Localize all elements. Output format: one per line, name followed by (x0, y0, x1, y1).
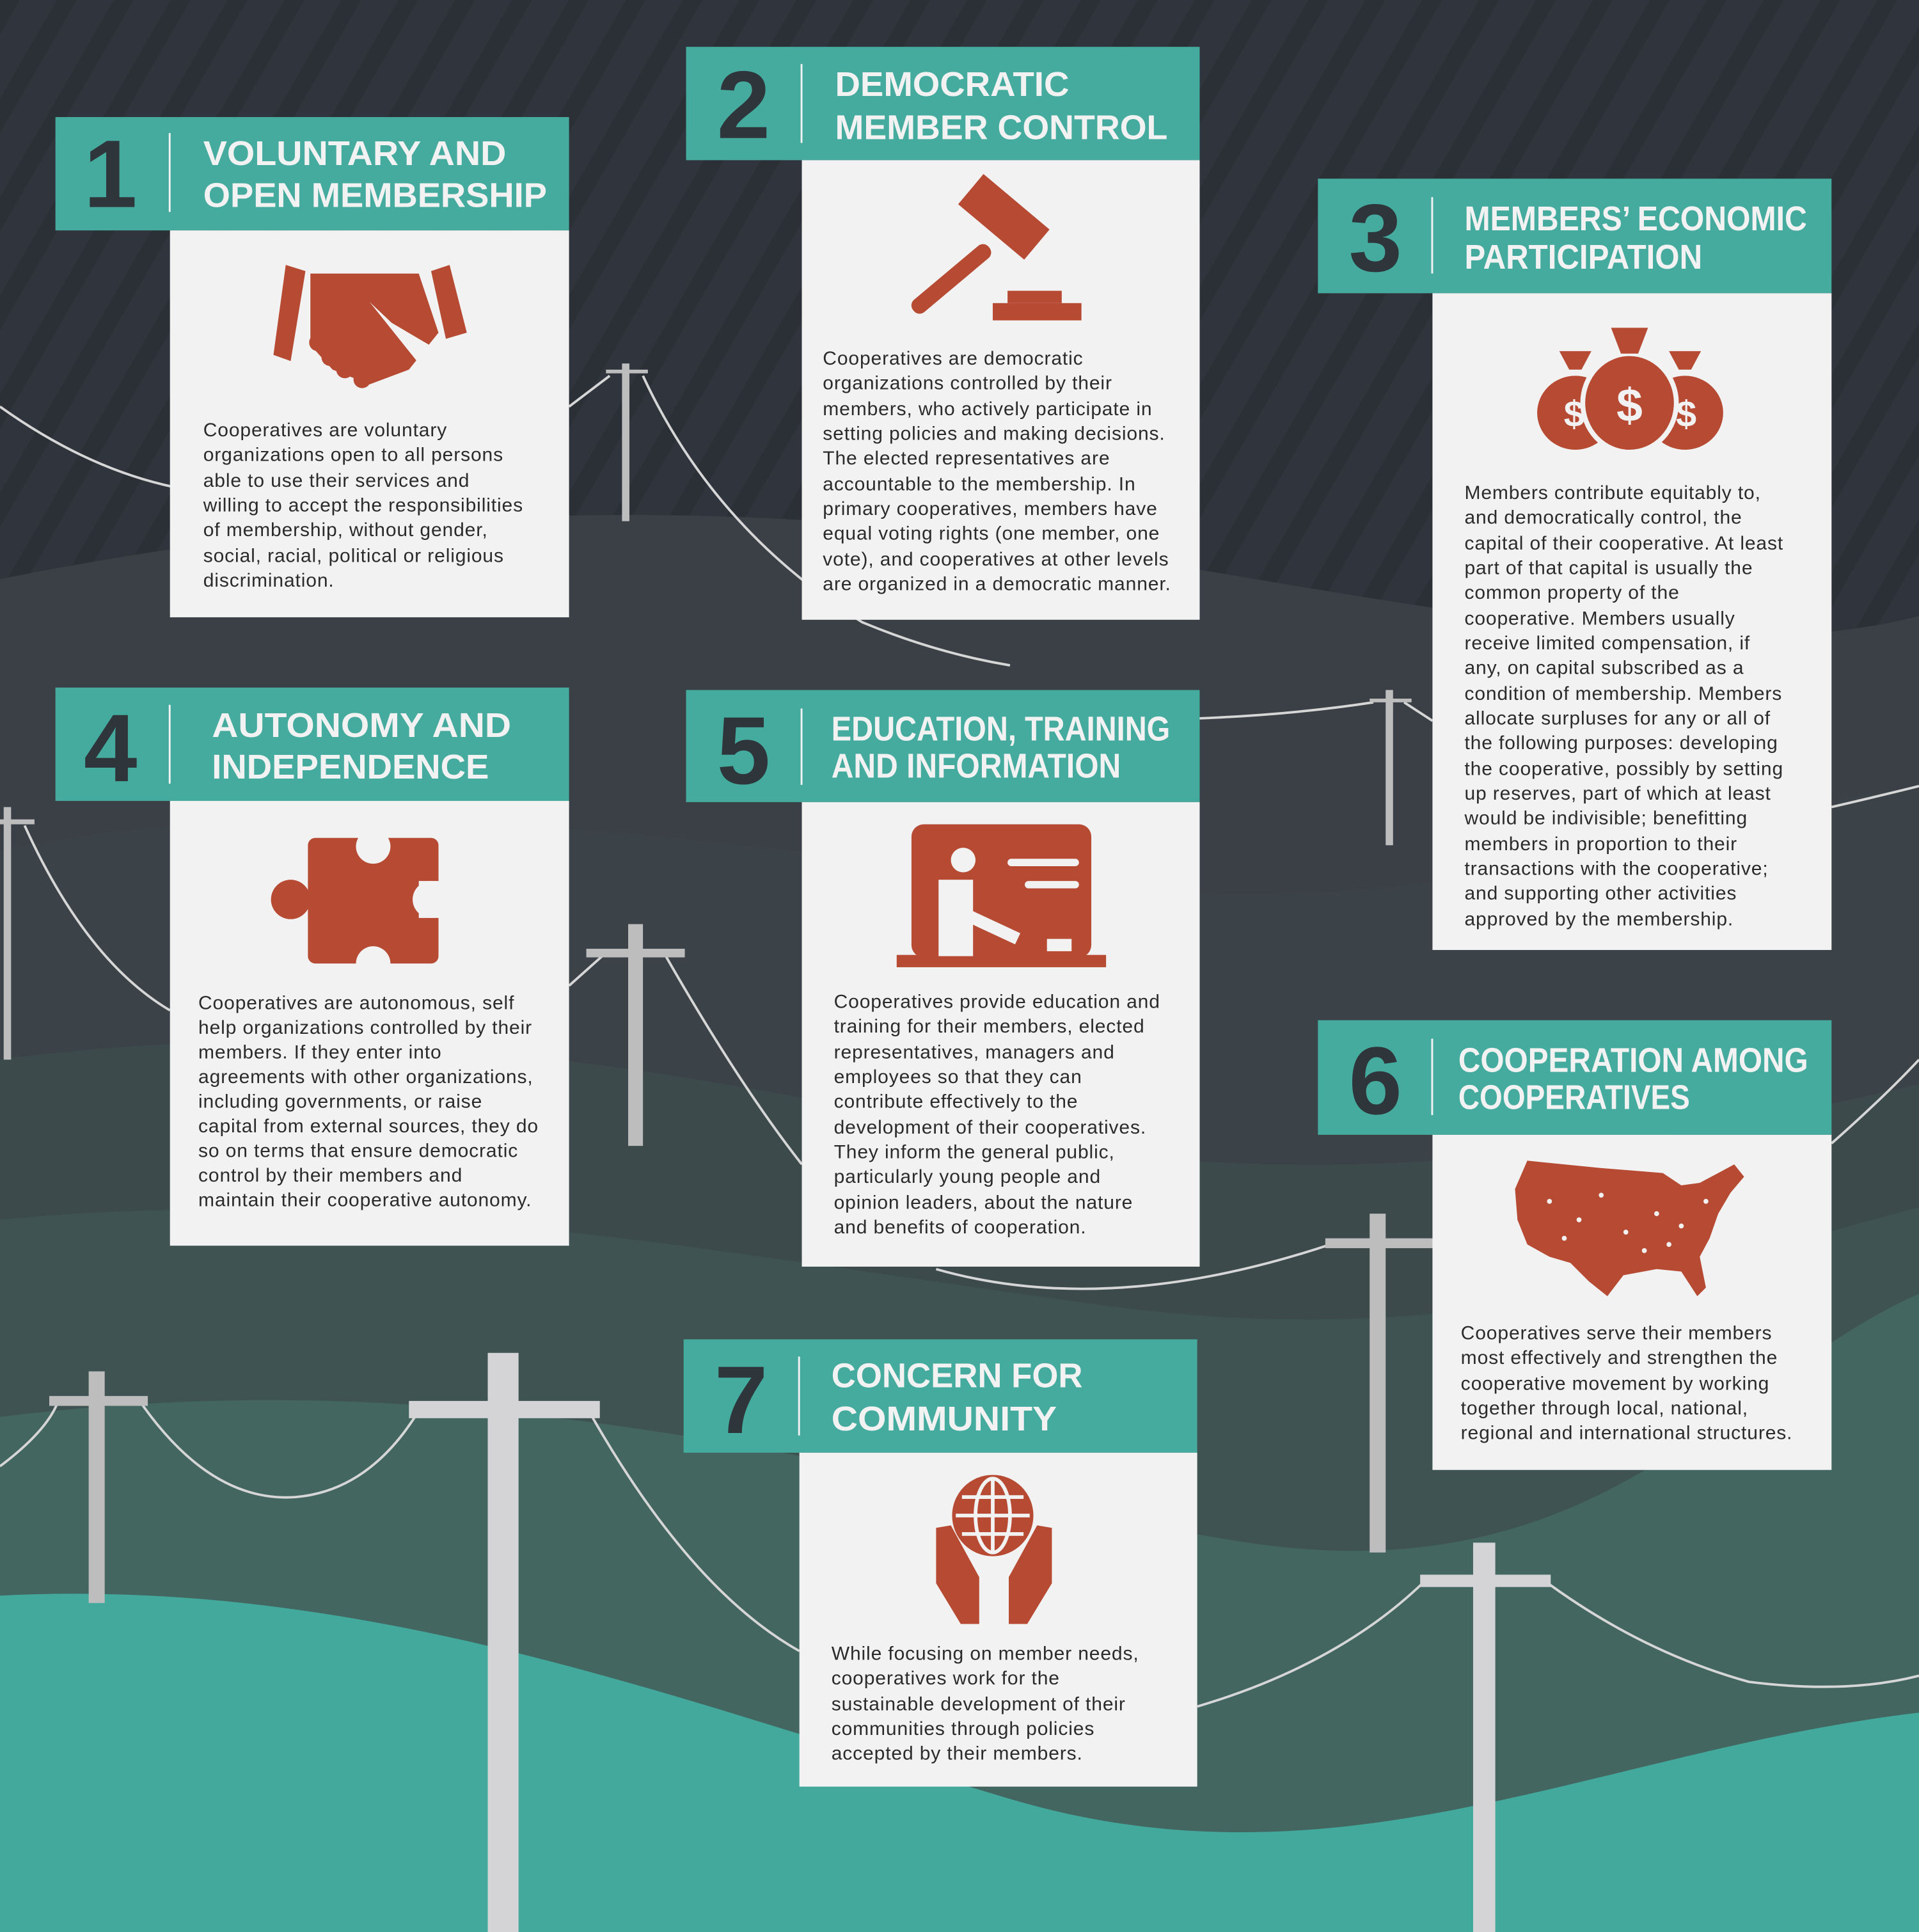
icon: money bags: $ (1676, 393, 1696, 434)
icon: gavel (908, 174, 1082, 321)
card 7: concern for community: accepted by their members. (832, 1743, 1083, 1764)
card 5: education, training and information: particularly young people and (834, 1166, 1101, 1187)
card 1: voluntary and open membership: able to use their services and (203, 470, 470, 491)
card 4: autonomy and independence: Cooperatives are autonomous, self (198, 992, 514, 1013)
card 1: voluntary and open membership: organizations open to all persons (203, 444, 503, 465)
card 3: members' economic participation: allocate surpluses for any or all of (1464, 708, 1771, 729)
card 3: members' economic participation: 3 (1348, 184, 1402, 292)
card 3: members' economic participation: and democratically control, the (1464, 507, 1742, 528)
card 3: members' economic participation: and supporting other activities (1464, 883, 1737, 904)
card 5: education, training and information: employees so that they can (834, 1066, 1082, 1088)
card 3: members' economic participation: cooperative. Members usually (1464, 608, 1735, 629)
card 1: voluntary and open membership (56, 117, 569, 617)
card 1: voluntary and open membership: 1 (84, 120, 137, 228)
card 3: members' economic participation: approved by the membership. (1464, 908, 1733, 930)
card 3: members' economic participation: any, on capital subscribed as a (1464, 658, 1744, 679)
icon: globe in hands (936, 1475, 1052, 1624)
card 3: members' economic participation: capital of their cooperative. At least (1464, 533, 1783, 554)
card 2: democratic member control: primary cooperatives, members have (823, 498, 1158, 519)
card 7: concern for community: 7 (715, 1346, 768, 1453)
card 2: democratic member control: MEMBER CONTROL (835, 109, 1167, 147)
card 4: autonomy and independence: AUTONOMY AND (212, 706, 511, 745)
card 5: education, training and information: representatives, managers and (834, 1041, 1115, 1063)
card 6: cooperation among cooperatives: COOPERATION AMONG (1458, 1041, 1808, 1080)
card 5: education, training and information: development of their cooperatives. (834, 1117, 1146, 1138)
card 7: concern for community (684, 1340, 1197, 1787)
icon: presentation board (897, 825, 1106, 967)
card 4: autonomy and independence: members. If they enter into (198, 1041, 442, 1063)
card 6: cooperation among cooperatives: 6 (1348, 1027, 1402, 1134)
card 3: members' economic participation: MEMBERS’ ECONOMIC (1464, 200, 1807, 238)
card 2: democratic member control (686, 47, 1199, 620)
card 4: autonomy and independence: maintain their cooperative autonomy. (198, 1190, 532, 1211)
card 2: democratic member control: The elected representatives are (823, 448, 1110, 469)
card 4: autonomy and independence: 4 (84, 694, 137, 802)
card 2: democratic member control: setting policies and making decisions. (823, 424, 1165, 445)
card 2: democratic member control: equal voting rights (one member, one (823, 523, 1160, 544)
icon: handshake (273, 265, 467, 388)
card 6: cooperation among cooperatives: cooperative movement by working (1461, 1374, 1769, 1395)
card 4: autonomy and independence: so on terms that ensure democratic (198, 1141, 518, 1162)
icon: money bags (1537, 328, 1723, 452)
card 3: members' economic participation: members in proportion to their (1464, 834, 1737, 855)
card 2: democratic member control: DEMOCRATIC (835, 65, 1069, 104)
card 1: voluntary and open membership: Cooperatives are voluntary (203, 420, 447, 441)
card 6: cooperation among cooperatives: COOPERATIVES (1458, 1078, 1690, 1116)
card 5: education, training and information: training for their members, elected (834, 1016, 1145, 1037)
power lines and poles (0, 376, 1919, 1707)
card 4: autonomy and independence: agreements with other organizations, (198, 1066, 533, 1088)
card 3: members' economic participation: the cooperative, possibly by setting (1464, 758, 1783, 779)
card 6: cooperation among cooperatives (1318, 1020, 1831, 1470)
card 3: members' economic participation: condition of membership. Members (1464, 683, 1782, 704)
card 1: voluntary and open membership: VOLUNTARY AND (203, 134, 506, 173)
card 3: members' economic participation: receive limited compensation, if (1464, 633, 1750, 654)
card 5: education, training and information: contribute effectively to the (834, 1091, 1078, 1112)
icon: money bags: $ (1564, 393, 1584, 434)
card 5: education, training and information (686, 690, 1199, 1267)
card 3: members' economic participation: PARTICIPATION (1464, 238, 1702, 276)
card 7: concern for community: COMMUNITY (832, 1400, 1057, 1438)
card 2: democratic member control: vote), and cooperatives at other levels (823, 549, 1169, 570)
card 7: concern for community: communities through policies (832, 1718, 1094, 1739)
card 3: members' economic participation: the following purposes: developing (1464, 732, 1778, 754)
card 2: democratic member control: 2 (717, 51, 770, 159)
card 3: members' economic participation: up reserves, part of which at least (1464, 783, 1771, 804)
card 1: voluntary and open membership: willing to accept the responsibilities (203, 495, 523, 516)
card 6: cooperation among cooperatives: together through local, national, (1461, 1398, 1748, 1419)
card 3: members' economic participation: would be indivisible; benefitting (1464, 808, 1748, 829)
card 2: democratic member control: accountable to the membership. In (823, 474, 1136, 495)
card 4: autonomy and independence: INDEPENDENCE (212, 748, 489, 786)
card 2: democratic member control: members, who actively participate in (823, 399, 1152, 420)
card 3: members' economic participation: part of that capital is usually the (1464, 558, 1753, 579)
card 5: education, training and information: EDUCATION, TRAINING (832, 710, 1170, 748)
card 7: concern for community: While focusing on member needs, (832, 1643, 1139, 1664)
card 5: education, training and information: 5 (717, 697, 770, 804)
card 6: cooperation among cooperatives: Cooperatives serve their members (1461, 1323, 1772, 1344)
card 5: education, training and information: and benefits of cooperation. (834, 1217, 1086, 1238)
card 7: concern for community: sustainable development of their (832, 1693, 1126, 1714)
card 1: voluntary and open membership: social, racial, political or religious (203, 545, 504, 566)
card 4: autonomy and independence: help organizations controlled by their (198, 1017, 532, 1038)
card 1: voluntary and open membership: of membership, without gender, (203, 519, 488, 541)
card 5: education, training and information: AND INFORMATION (832, 747, 1121, 785)
card 7: concern for community: cooperatives work for the (832, 1668, 1060, 1689)
icon: puzzle piece (271, 829, 450, 981)
icon: money bags: $ (1616, 379, 1643, 432)
icon: USA map (1515, 1160, 1744, 1296)
card 4: autonomy and independence: capital from external sources, they do (198, 1116, 539, 1137)
card 6: cooperation among cooperatives: most effectively and strengthen the (1461, 1347, 1778, 1368)
card 5: education, training and information: They inform the general public, (834, 1141, 1115, 1162)
card 2: democratic member control: are organized in a democratic manner. (823, 574, 1171, 595)
card 3: members' economic participation: common property of the (1464, 582, 1680, 603)
card 6: cooperation among cooperatives: regional and international structures. (1461, 1423, 1792, 1444)
card 3: members' economic participation: Members contribute equitably to, (1464, 482, 1761, 503)
card 5: education, training and information: opinion leaders, about the nature (834, 1192, 1133, 1213)
card 1: voluntary and open membership: OPEN MEMBERSHIP (203, 177, 547, 215)
card 3: members' economic participation (1318, 178, 1831, 950)
card 3: members' economic participation: transactions with the cooperative; (1464, 858, 1769, 879)
card 5: education, training and information: Cooperatives provide education and (834, 991, 1160, 1012)
card 4: autonomy and independence: including governments, or raise (198, 1091, 482, 1112)
card 2: democratic member control: Cooperatives are democratic (823, 348, 1084, 369)
card 4: autonomy and independence: control by their members and (198, 1165, 462, 1186)
card 7: concern for community: CONCERN FOR (832, 1357, 1083, 1395)
card 2: democratic member control: organizations controlled by their (823, 373, 1112, 394)
card 4: autonomy and independence (56, 688, 569, 1246)
card 1: voluntary and open membership: discrimination. (203, 570, 335, 591)
